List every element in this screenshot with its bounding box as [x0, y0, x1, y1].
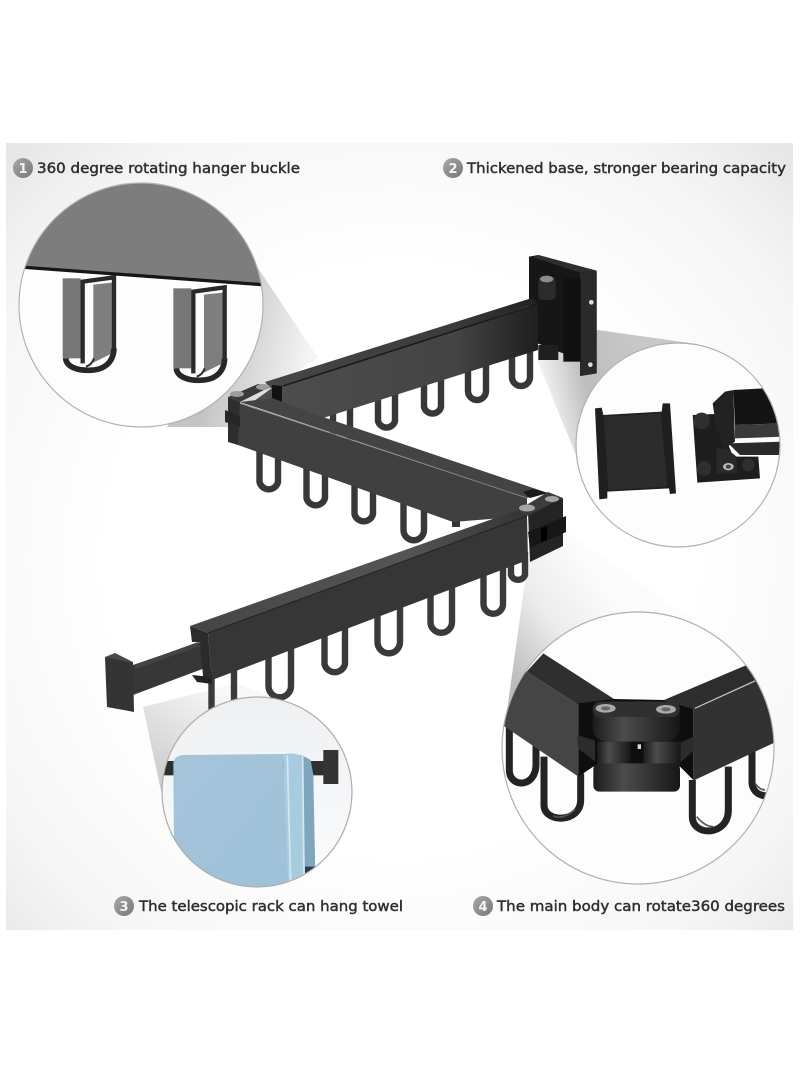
label 4: 4	[478, 900, 488, 915]
right hinge joint	[518, 492, 566, 562]
grey rack underside	[26, 184, 260, 283]
upper arm	[250, 298, 538, 418]
hinge top block with screws	[593, 702, 680, 742]
label 1: 360 degree rotating hanger buckle	[37, 161, 300, 177]
first hook	[63, 277, 114, 370]
label 1: 1	[18, 162, 28, 177]
label 2: 2	[448, 162, 458, 177]
main folding rack	[105, 255, 597, 719]
hinge centre	[577, 699, 694, 792]
right arm	[664, 665, 780, 781]
label 4: The main body can rotate360 degrees	[496, 899, 785, 915]
callout cones linking circles to rack	[143, 268, 693, 800]
slide plate	[595, 403, 676, 499]
towel front	[173, 754, 289, 893]
left hinge joint	[225, 384, 272, 445]
label 3: The telescopic rack can hang towel	[138, 899, 403, 915]
rack edge line	[20, 267, 267, 285]
hooks on lower arm	[212, 552, 525, 719]
towel bar	[160, 750, 338, 784]
circle 3: towel on telescopic rack	[160, 697, 352, 893]
telescopic inner bar and end cap	[105, 642, 212, 712]
lower arm	[190, 510, 528, 680]
circle 1: hanger buckle detail	[18, 182, 264, 428]
hooks on middle arm	[260, 445, 424, 540]
towel fold	[284, 753, 305, 881]
back towel layer	[303, 756, 316, 873]
circle 2: thickened base detail	[576, 343, 783, 547]
label 2: Thickened base, stronger bearing capacity	[466, 161, 786, 177]
left arm	[500, 653, 614, 777]
middle arm	[238, 398, 548, 522]
label 3: 3	[119, 900, 129, 915]
back hooks	[509, 727, 780, 831]
circle 4: rotating joint detail	[500, 612, 780, 884]
background panel	[6, 143, 793, 930]
hooks on upper arm	[333, 340, 530, 440]
wall bracket	[529, 255, 597, 376]
second hook	[173, 287, 225, 380]
hinge base	[693, 388, 783, 483]
